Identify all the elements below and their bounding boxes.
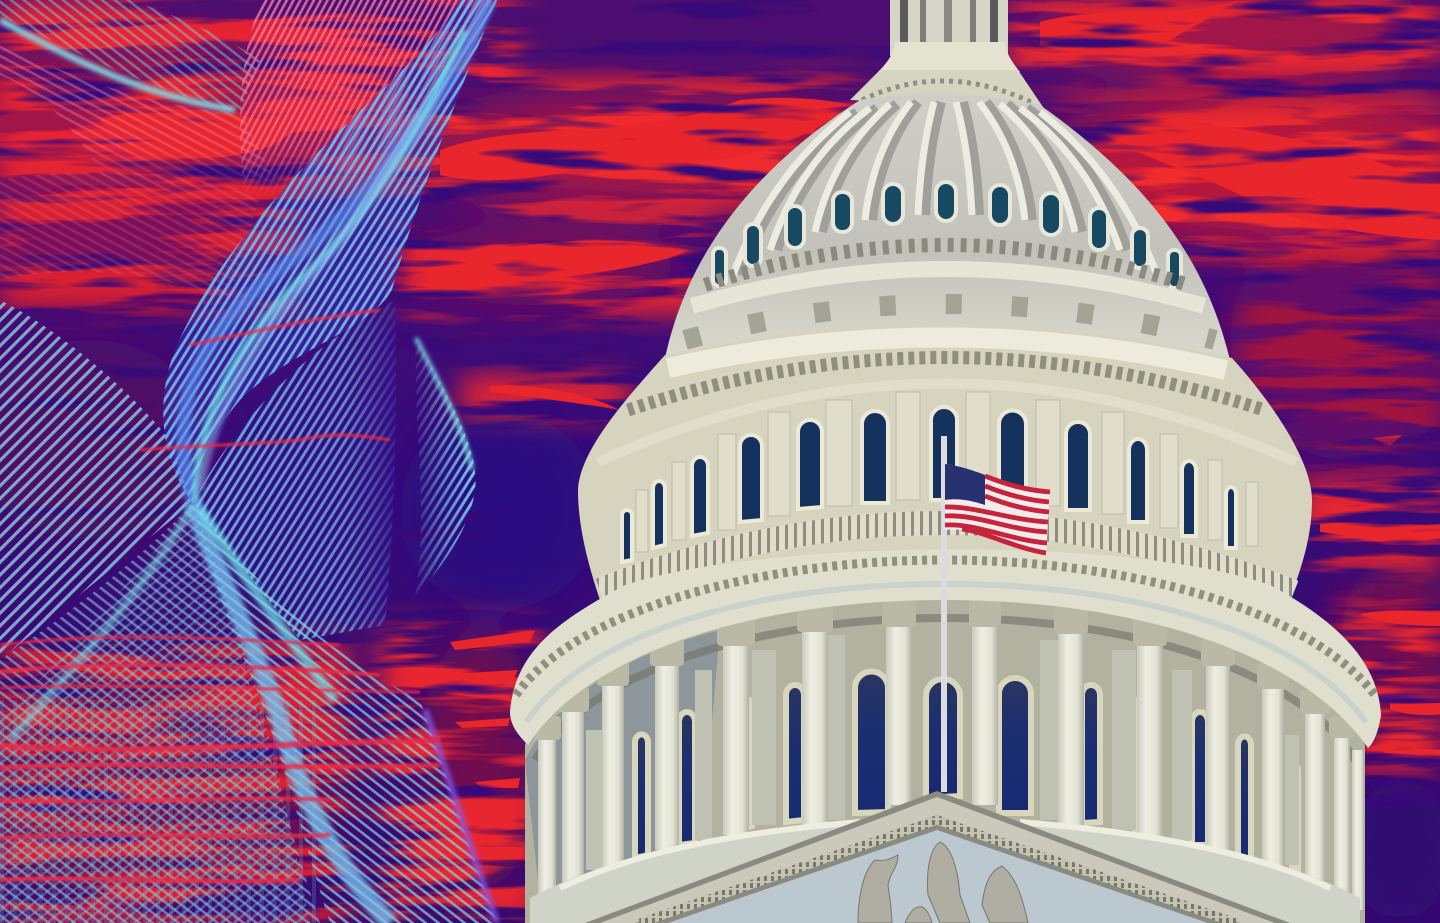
dome: main shell [665, 94, 1230, 360]
drum: pilasters [636, 392, 1258, 552]
drum: upper wall [578, 323, 1312, 600]
colonnade: ledge highlight [560, 822, 1330, 888]
abstract wave: main ribbon [163, 0, 497, 640]
dome: ribs [733, 102, 1157, 275]
abstract wave: top left ribbon [0, 0, 280, 190]
abstract wave: top pink ribbon [240, 0, 495, 200]
abstract wave: faint arcs upper left [0, 172, 260, 300]
drum: arched windows [622, 407, 1236, 562]
colonnade: curved entablature [510, 549, 1381, 748]
abstract wave: crescent edge highlight [416, 338, 472, 470]
pediment [585, 791, 1290, 923]
colonnade: pilasters [586, 635, 1299, 870]
colonnade: shadow left [525, 630, 720, 900]
abstract wave: lower right lobes [193, 503, 497, 923]
colonnade: back wall [525, 585, 1365, 923]
drum: balustrade [600, 523, 1294, 592]
abstract wave: lower left fan [0, 503, 320, 923]
colonnade: base ledge [530, 822, 1360, 923]
dome: upper windows [713, 182, 1181, 288]
abstract wave: left hatch lines [0, 300, 192, 660]
colonnade: capitals [533, 599, 1355, 740]
red streaks across the waves [0, 310, 440, 881]
American flag [945, 464, 1050, 555]
colonnade: frieze shadow [535, 618, 1355, 760]
colonnade: columns [538, 615, 1364, 910]
Capitol building [510, 0, 1381, 923]
dome: rib shadows [740, 102, 1127, 275]
dome: ornamental ring [705, 245, 1188, 285]
drum: top cornice [668, 337, 1226, 370]
abstract wave: right crescent [415, 335, 476, 597]
lantern: top tower [850, 0, 1045, 110]
pediment: statues [858, 842, 1028, 923]
flagpole [941, 436, 947, 792]
dome: lower brackets [685, 304, 1215, 340]
colonnade: arched windows [635, 672, 1298, 870]
